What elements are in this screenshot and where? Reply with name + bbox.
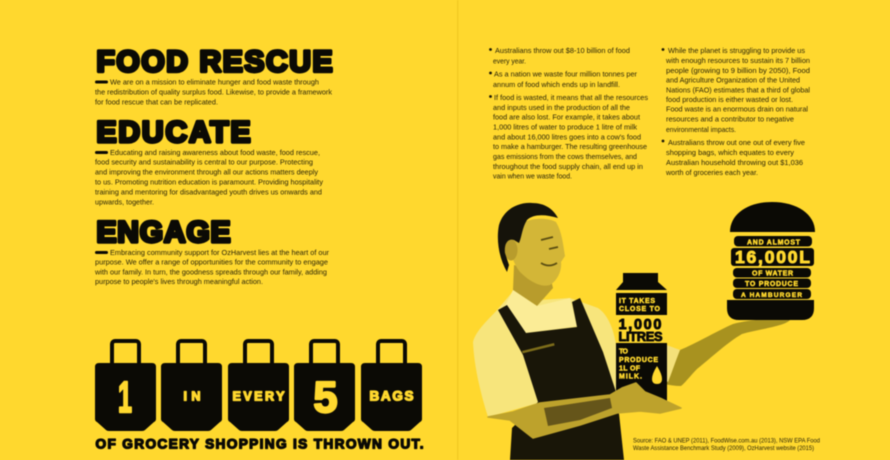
icon: bag with 5 (294, 341, 355, 431)
source note: Waste Assistance Benchmark Study (2009), OzHarvest website (2015) (633, 446, 814, 452)
text block: facts column one: vain when we waste food. (493, 172, 572, 180)
text block: facts column two: and Agriculture Organization of the United (666, 76, 800, 84)
text block: engage description: purpose to people's lives through meaningful action. (95, 277, 263, 286)
text block: facts column one: and about 16,000 litres goes into a cow's food (493, 132, 641, 141)
icon: bag with in: IN (184, 389, 200, 403)
text block: facts column one: food are also lost. For example, it takes about (493, 112, 640, 122)
icon: bag with every (228, 341, 289, 431)
text block: food rescue description: We are on a mission to eliminate hunger and food waste through (110, 78, 319, 86)
chef: right sleeve (664, 344, 680, 382)
burger: AND ALMOST (747, 240, 801, 246)
icon: bag with bags (361, 341, 422, 431)
text block: facts column two: Australian household throwing out $1,036 (666, 158, 803, 167)
text block: food rescue description: the redistribution of quality surplus food. Likewise, to provide a framework (95, 88, 332, 96)
illustration: chef holding carton and burger (473, 202, 815, 460)
text block: facts column two: environmental impacts. (666, 125, 736, 134)
milk carton: TO (619, 348, 629, 356)
heading: educate: EDUCATE (96, 116, 250, 149)
chef: apron (498, 298, 624, 460)
milk carton: LITRES (618, 329, 663, 344)
text block: engage description (94, 248, 330, 286)
icon: bag with 1: 1 (118, 373, 132, 422)
source note: Source: FAO & UNEP (2011), FoodWise.com.au (2013), NSW EPA Food (633, 438, 820, 444)
chef: jacket (473, 289, 618, 417)
burger: OF WATER (752, 270, 793, 278)
milk carton: IT TAKES (619, 298, 655, 305)
text block: educate description (95, 148, 323, 206)
text block: facts column two: worth of groceries each year. (665, 168, 758, 177)
text block: educate description: food security and sustainability is central to our purpose. Protecting (95, 158, 313, 166)
chef: ear (504, 240, 518, 260)
text block: food rescue description (95, 78, 332, 106)
text block: engage description: Embracing community support for OzHarvest lies at the heart of our (110, 248, 330, 257)
burger: TO PRODUCE (745, 281, 798, 288)
icon: bag with 5: 5 (314, 373, 338, 422)
chef: collar (505, 290, 577, 333)
text block: educate description: to us. Promoting nutrition education is paramount. Providing hospitality (95, 178, 323, 186)
panel: educate (95, 116, 323, 206)
chef: forearm and hand (488, 383, 681, 438)
text block: educate description: Educating and raising awareness about food waste, food rescue, (110, 148, 320, 157)
text block: educate description: upwards, together. (95, 197, 154, 206)
text block: food rescue description: for food rescue that can be replicated. (95, 98, 218, 106)
icon: bag with every: EVERY (232, 389, 285, 403)
text block: facts column two: with enough resources to sustain its 7 billion (665, 56, 810, 65)
burger: A HAMBURGER (741, 292, 802, 299)
text block: facts column one (489, 46, 648, 180)
chef: head (510, 219, 565, 286)
milk carton: CLOSE TO (619, 306, 661, 313)
icon: bag with 1 (95, 341, 156, 431)
text block: facts column two: While the planet is struggling to provide us (668, 46, 805, 55)
text block: facts column two: Australians throw out one out of every five (668, 138, 805, 147)
text block: facts column two: resources and a contributor to negative (666, 114, 794, 124)
text block: facts column two (662, 46, 810, 177)
text block: facts column one: As a nation we waste four million tonnes per (494, 70, 638, 78)
milk carton: 1L OF (619, 366, 641, 372)
text block: facts column two: people (growing to 9 billion by 2050), Food (666, 66, 810, 75)
text block: facts column one: and inputs used in the production of all the (493, 103, 630, 112)
burger (727, 202, 815, 320)
text block: educate description: training and mentoring for disadvantaged youth drives us onwards and (95, 188, 322, 196)
text block: engage description: purpose. We offer a range of opportunities for the community to engage (95, 258, 328, 267)
chef: hair (498, 203, 558, 272)
panel: engage (94, 216, 330, 286)
text block: facts column one: every year. (493, 56, 526, 66)
icon: bag with in (161, 341, 222, 431)
text block: engage description: with our family. In turn, the goodness spreads through our family, adding (94, 267, 327, 276)
panel: food rescue (95, 46, 332, 106)
text block: facts column one: If food is wasted, it means that all the resources (494, 93, 648, 102)
chef: face detail (541, 237, 558, 266)
text block: facts column two: Nations (FAO) estimates that a third of global (666, 86, 810, 94)
text block: facts column one: annum of food which ends up in landfill. (493, 80, 620, 89)
text block: facts column two: Food waste is an enormous drain on natural (666, 104, 808, 114)
heading: engage: ENGAGE (96, 216, 230, 249)
panel: shopping bags statistic (95, 341, 424, 452)
milk carton: PRODUCE (619, 357, 658, 364)
chef: neck (513, 265, 553, 306)
milk carton (616, 273, 667, 406)
source note (633, 438, 820, 452)
heading: food rescue: FOOD RESCUE (96, 46, 332, 78)
text block: facts column two: food production is either wasted or lost. (666, 95, 793, 104)
icon: bag with bags: BAGS (370, 388, 414, 403)
burger: 16,000L (735, 247, 810, 267)
chef: apron logo (522, 343, 555, 353)
text block: facts column one: throughout the food supply chain, all end up in (493, 162, 643, 171)
chef: tattoo (544, 398, 612, 426)
text block: educate description: and improving the environment through all our actions matters deeply (95, 168, 318, 176)
text block: facts column one: to make a hamburger. The resulting greenhouse (493, 142, 647, 151)
milk carton: 1,000 (618, 317, 662, 333)
chef: raised arm (664, 319, 790, 386)
text block: facts column one: Australians throw out $8-10 billion of food (495, 46, 630, 55)
caption: grocery shopping: OF GROCERY SHOPPING IS THROWN OUT. (96, 436, 424, 452)
text block: facts column one: gas emissions from the cows themselves, and (493, 152, 637, 161)
text block: facts column two: shopping bags, which equates to every (666, 148, 794, 157)
text block: facts column one: 1,000 litres of water to produce 1 litre of milk (493, 122, 637, 132)
milk carton: MILK. (619, 374, 642, 380)
